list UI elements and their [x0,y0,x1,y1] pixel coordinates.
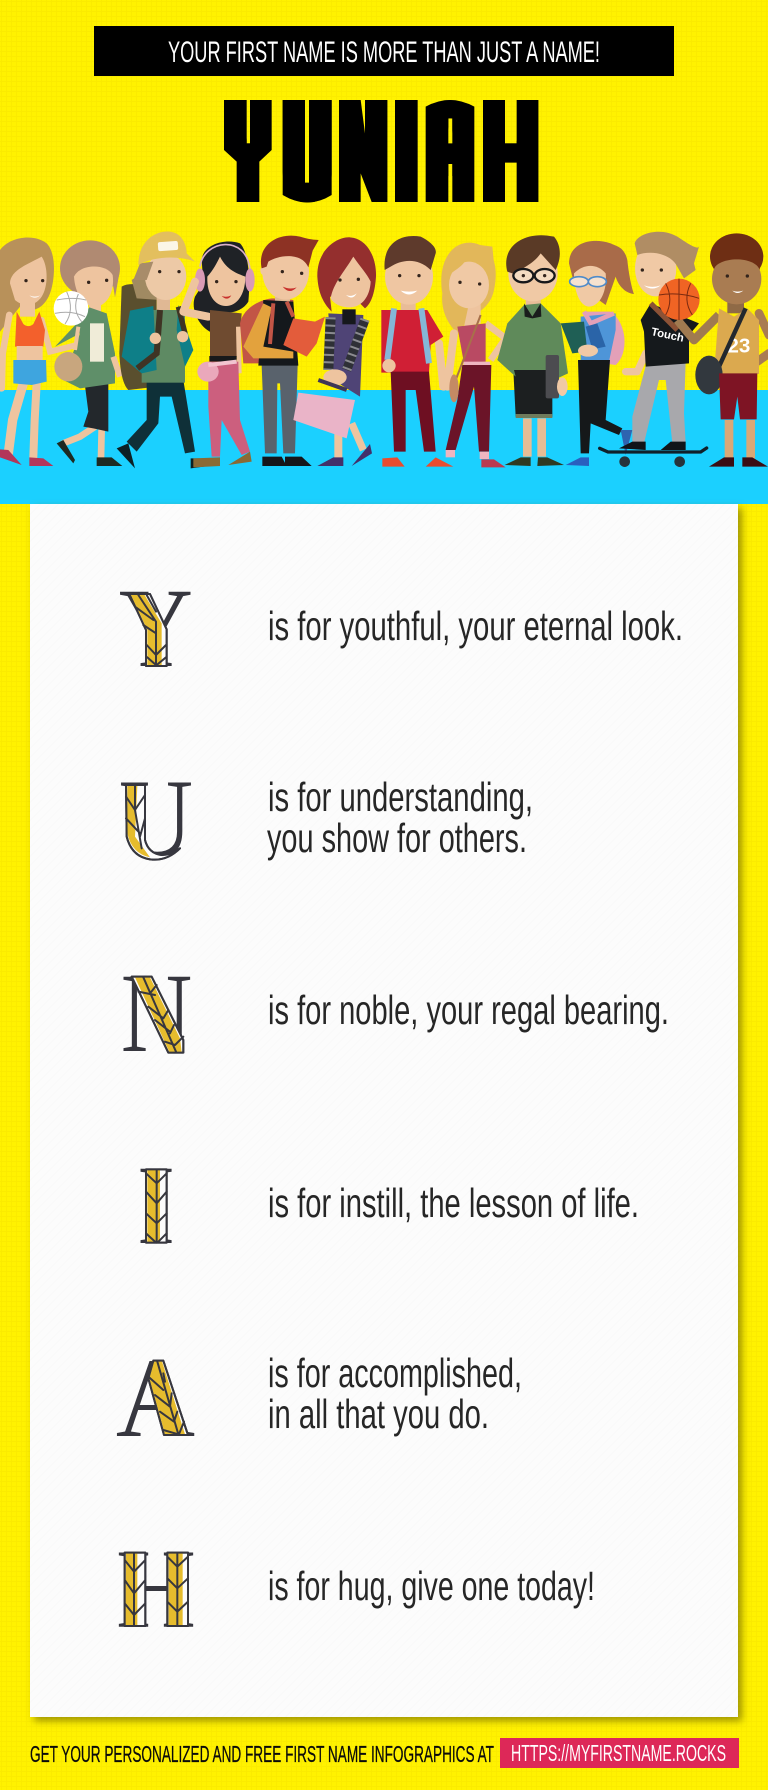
person 11 [600,232,719,467]
person 2 [54,240,122,466]
person 5 [240,236,325,466]
row H [116,1528,595,1652]
letter Y: Y [119,567,193,691]
footer [30,1738,739,1768]
person 11: Touch [650,326,685,345]
title: name: I [390,68,423,234]
person 6 [293,237,376,466]
title: name [224,100,538,202]
title: name: U [277,69,338,234]
text row U: is for understanding, [268,774,533,820]
person 1 [0,238,77,466]
title: name: Y [224,68,272,234]
person 8 [441,243,506,467]
text row H: is for hug, give one today! [268,1563,595,1609]
blue floor band [0,390,768,504]
person 12 [695,233,768,467]
text row U: you show for others. [267,815,527,861]
person 7 [381,236,453,467]
title: name: N [333,69,393,234]
letter H: H [116,1528,196,1652]
people group, right half [381,232,768,467]
text row U [267,774,533,861]
row I [136,1144,639,1268]
title: name: A [426,69,474,234]
person 3 [117,231,208,468]
row N [121,951,669,1076]
letter N: N [121,951,192,1076]
row Y [119,567,683,691]
text row A: in all that you do. [268,1391,489,1437]
row U [119,758,533,882]
letter A: A [116,1337,195,1461]
title: name: H [476,69,545,234]
text row A: is for accomplished, [268,1350,522,1396]
text row A [268,1350,522,1437]
letter U: U [119,758,193,882]
letter I: I [136,1144,176,1268]
letters panel [30,504,738,1717]
header banner [94,26,674,76]
row A [116,1337,522,1461]
person 12: 23 [727,335,750,358]
people group, left half [0,231,376,468]
person 9 [497,235,568,466]
person 10 [561,241,634,466]
person 4 [183,241,255,467]
